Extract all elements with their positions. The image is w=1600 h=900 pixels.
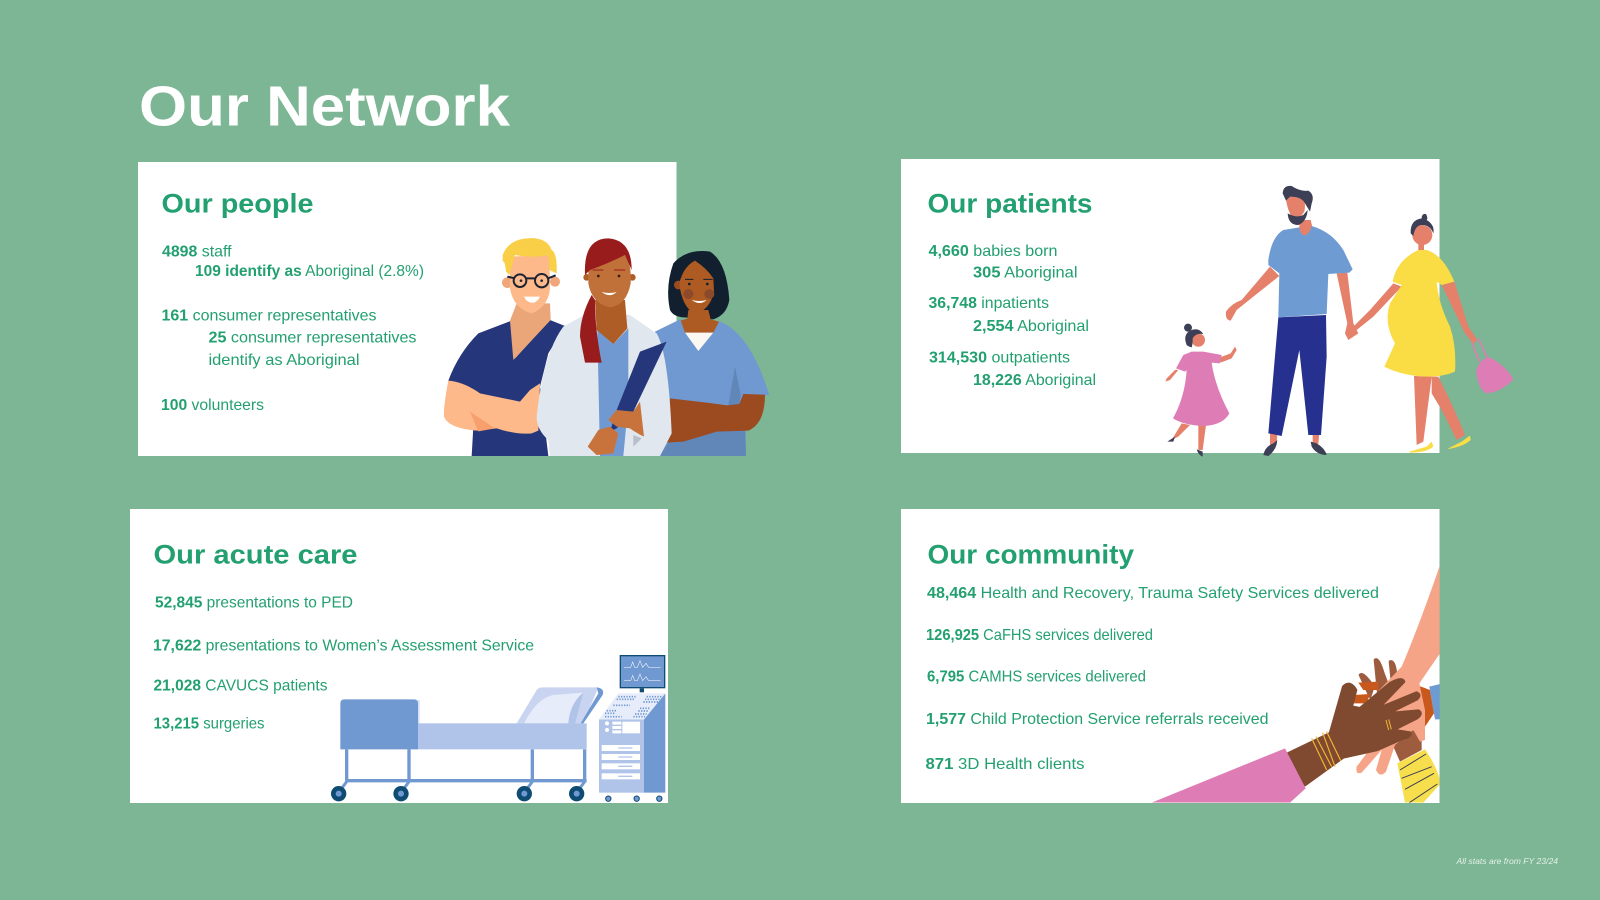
figure: father [1226, 186, 1358, 456]
text block: people stats: 4898 staff [162, 244, 232, 260]
text block: community stats: 1,577 Child Protection Service referrals received [926, 711, 1268, 728]
text block: patient stats: 305 Aboriginal [973, 264, 1078, 282]
text block: people stats: 161 consumer representatives [162, 308, 376, 324]
illustration: hospital bed and monitor [331, 656, 665, 801]
text block: acute care stats: 13,215 surgeries [154, 716, 264, 732]
text block: acute care stats: 21,028 CAVUCS patients [154, 678, 328, 694]
panel: our acute care [130, 509, 668, 803]
text block: people stats: identify as Aboriginal [208, 352, 360, 369]
text block: people stats [161, 244, 424, 414]
figure: pregnant mother [1348, 214, 1513, 453]
text block: patient stats: 4,660 babies born [928, 243, 1058, 260]
text block: community stats: 6,795 CAMHS services delivered [927, 668, 1146, 686]
text block: people stats: 25 consumer representatives [208, 330, 416, 346]
heading: our acute care: Our acute care [154, 540, 358, 570]
text block: community stats: 48,464 Health and Recovery, Trauma Safety Services delivered [927, 585, 1379, 602]
hospital bed [331, 687, 603, 801]
text block: people stats: 100 volunteers [161, 397, 264, 414]
text block: community stats: 126,925 CaFHS services delivered [926, 627, 1153, 644]
illustration: stacked hands [1152, 565, 1440, 803]
text block: patient stats [928, 243, 1096, 389]
figure: doctor with clipboard [537, 238, 672, 456]
hand: peach arm from top right [1356, 565, 1440, 775]
figure: blond nurse with glasses [444, 238, 565, 456]
illustration: family walking [1165, 186, 1513, 457]
heading: our community: Our community [928, 540, 1134, 570]
panel: our people [138, 162, 769, 456]
figure: daughter [1165, 324, 1237, 457]
text block: acute care stats: 52,845 presentations to PED [155, 594, 353, 612]
panel: our community [901, 509, 1440, 803]
text block: people stats: 109 identify as Aboriginal (2.8%) [195, 263, 424, 280]
text block: community stats: 871 3D Health clients [926, 756, 1084, 773]
text block: community stats [926, 585, 1379, 773]
text block: patient stats: 36,748 inpatients [928, 295, 1049, 312]
figure: nurse with dark hair [655, 251, 769, 456]
hand: dark with pink sleeve and bracelets [1152, 680, 1420, 803]
heading: our patients: Our patients [928, 188, 1092, 218]
text block: patient stats: 314,530 outpatients [929, 350, 1070, 366]
title: Our Network [139, 74, 510, 138]
text block: acute care stats [153, 594, 534, 732]
footnote: All stats are from FY 23/24 [1455, 857, 1559, 866]
hand: brown with yellow sleeve [1360, 659, 1439, 803]
illustration: three health workers [444, 238, 769, 456]
medical monitor cart [599, 656, 665, 801]
text block: acute care stats: 17,622 presentations to Women’s Assessment Service [153, 638, 534, 654]
heading: our people: Our people [162, 188, 314, 218]
text block: patient stats: 2,554 Aboriginal [973, 318, 1089, 335]
text block: patient stats: 18,226 Aboriginal [973, 372, 1096, 389]
panel: our patients [901, 159, 1513, 457]
hand: orange with blue sleeve [1353, 682, 1440, 727]
